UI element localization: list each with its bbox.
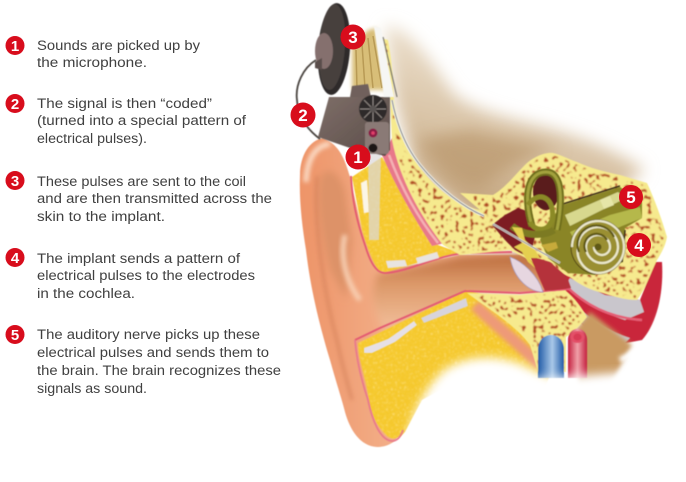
step 3 text	[37, 174, 272, 224]
vein blue	[538, 335, 564, 378]
callout badge 2	[290, 102, 316, 128]
callout badge 3	[340, 24, 366, 50]
step 4 text: in the cochlea.	[37, 286, 135, 301]
ear canal tube under processor	[368, 152, 381, 240]
white fade on right edge	[620, 250, 672, 360]
white fade over lower fat	[405, 320, 686, 482]
callout badge 5	[619, 185, 643, 209]
electrode array wire	[392, 100, 484, 216]
step 2 text: electrical pulses).	[37, 131, 147, 146]
badge 3: 3	[11, 173, 19, 190]
step 4 text	[37, 251, 255, 301]
eardrum	[510, 257, 543, 292]
badge 4	[6, 248, 24, 267]
badge 2: 2	[11, 96, 19, 113]
red chamber	[530, 256, 571, 291]
artery red	[568, 329, 587, 378]
callout badge 2: 2	[298, 106, 308, 125]
callout badge 3: 3	[348, 28, 358, 47]
step 5 text	[37, 327, 281, 396]
hair	[352, 28, 390, 90]
upper temporal bone	[380, 38, 667, 300]
semicircular canals	[512, 172, 560, 234]
upper fat pad	[352, 157, 460, 273]
lower skin line	[355, 289, 570, 340]
step 2 text: The signal is then “coded”	[37, 96, 212, 111]
step 5 text: signals as sound.	[37, 381, 147, 396]
step 3 text: skin to the implant.	[37, 209, 165, 224]
canal inner dark	[533, 174, 559, 210]
step 2 text: (turned into a special pattern of	[37, 113, 246, 128]
ossicles	[512, 227, 540, 268]
ear illustration	[290, 2, 686, 482]
cochlea spiral	[571, 220, 625, 274]
canal cartilage strips	[364, 321, 417, 353]
control panel	[365, 122, 389, 154]
step 3	[6, 171, 272, 224]
concha shading	[319, 171, 352, 300]
grey membrane bands	[565, 278, 644, 320]
step 1 text: Sounds are picked up by	[37, 38, 200, 53]
step 2	[6, 94, 246, 146]
antihelix highlight	[343, 235, 360, 300]
coil disc	[315, 2, 353, 96]
callout badge 4: 4	[634, 236, 644, 255]
step 4 text: electrical pulses to the electrodes	[37, 268, 255, 283]
helix groove shading	[316, 176, 352, 400]
badge 2	[6, 94, 24, 113]
helix highlight	[306, 144, 330, 182]
step 5 text: The auditory nerve picks up these	[37, 327, 260, 342]
coil wire	[297, 60, 320, 139]
callout badge 1	[346, 144, 370, 170]
middle ear cavity	[492, 208, 536, 258]
ear canal	[373, 252, 548, 330]
upper fat white patches	[361, 180, 369, 213]
vestibule and inner ear body	[540, 187, 642, 275]
lower bone	[467, 290, 587, 372]
step 1	[6, 36, 200, 70]
step 4 text: The implant sends a pattern of	[37, 251, 240, 266]
fan dial	[359, 95, 387, 123]
step 3 text: and are then transmitted across the	[37, 191, 272, 206]
processor body	[318, 84, 390, 156]
deep tissue behind cochlea	[550, 262, 662, 345]
callout badge 4	[627, 233, 651, 257]
lead line along scalp	[383, 37, 397, 97]
badge 3	[6, 171, 24, 190]
head tissue background	[385, 25, 645, 225]
orange fringe under lower bone	[475, 305, 540, 365]
cavity dark edge	[563, 186, 625, 262]
badge 1: 1	[11, 38, 19, 55]
pink membrane line	[565, 285, 642, 320]
white fade below vessels	[525, 372, 650, 410]
step 4	[6, 248, 255, 301]
tissue under lower bone	[575, 312, 632, 395]
outer ear	[300, 138, 545, 447]
badge 5: 5	[11, 327, 19, 344]
callout badge 5: 5	[626, 188, 636, 207]
badge 1	[6, 36, 24, 55]
step 3 text: These pulses are sent to the coil	[37, 174, 246, 189]
step 1 text: the microphone.	[37, 55, 147, 70]
step 1 text	[37, 38, 200, 70]
muscle stripe	[382, 138, 445, 246]
white implant strip	[374, 26, 394, 97]
callout badge 1: 1	[353, 148, 363, 167]
upper fat skin line	[351, 176, 512, 273]
badge 5	[6, 325, 24, 344]
lower fat pad	[358, 290, 560, 439]
step 5	[6, 325, 281, 396]
badge 4: 4	[11, 250, 20, 267]
step 5 text: electrical pulses and sends them to	[37, 345, 269, 360]
step 5 text: the brain. The brain recognizes these	[37, 363, 281, 378]
step 2 text	[37, 96, 246, 146]
head shadow beside bone	[418, 130, 565, 190]
vestibular nerve branches	[565, 192, 626, 226]
instructions text list	[6, 36, 281, 396]
